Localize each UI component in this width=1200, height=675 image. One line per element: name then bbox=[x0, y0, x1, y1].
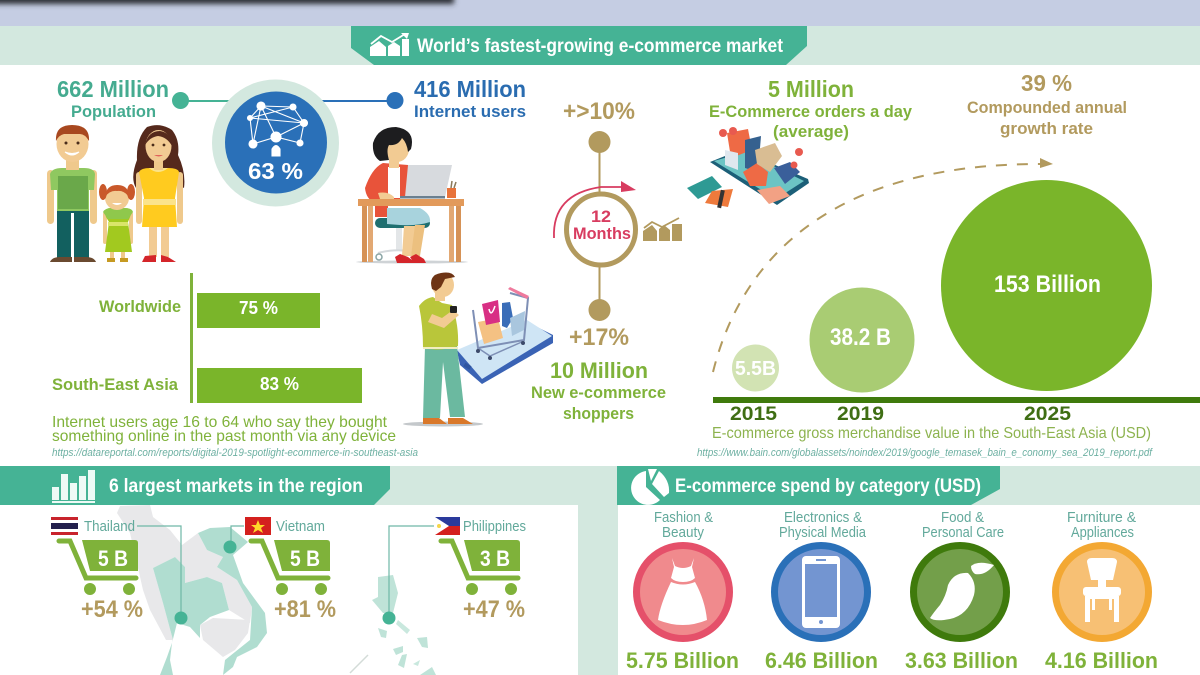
icon: growth chart bbox=[370, 33, 409, 56]
timeline axis bbox=[588, 131, 610, 321]
stat: more than 10 percent: +>10% bbox=[563, 98, 635, 125]
category: fashion and beauty bbox=[626, 509, 739, 673]
icon: bar chart bbox=[52, 470, 95, 503]
flag: vietnam bbox=[245, 517, 271, 535]
axis years bbox=[730, 404, 1071, 425]
banner: market heading bbox=[351, 26, 807, 65]
stat: internet users: 416 Million bbox=[414, 76, 526, 102]
axis years: 2015 bbox=[730, 404, 777, 425]
source link: datareportal: https://datareportal.com/reports/digital-2019-spotlight-ecommerce-in-southeast-asia bbox=[52, 447, 418, 459]
bubble: 2015 bbox=[732, 344, 779, 392]
shopping cart bbox=[473, 287, 529, 360]
category: food and personal care: Food & bbox=[941, 509, 984, 526]
category: food and personal care: 3.63 Billion bbox=[905, 648, 1018, 673]
icon: chair bbox=[1083, 558, 1121, 622]
bar: worldwide: Worldwide bbox=[99, 297, 181, 316]
stat: new shoppers: shoppers bbox=[563, 404, 634, 423]
bubble: 2015: 5.5B bbox=[735, 358, 776, 380]
caption: chart: E-commerce gross merchandise value in the South-East Asia (USD) bbox=[712, 425, 1151, 442]
arrow: dashed growth curve bbox=[713, 158, 1053, 372]
flag: thailand bbox=[51, 517, 78, 535]
icon: cart 5B: 5 B bbox=[98, 546, 128, 571]
woman bbox=[133, 125, 184, 262]
axis years: 2019 bbox=[837, 404, 884, 425]
stat: daily orders: (average) bbox=[773, 122, 849, 141]
market: philippines bbox=[382, 517, 526, 624]
bar: worldwide bbox=[99, 293, 320, 328]
section band: market heading bbox=[0, 26, 1200, 65]
icon: dress bbox=[658, 558, 707, 625]
category: fashion and beauty: Beauty bbox=[662, 524, 704, 541]
arrow: circular bbox=[554, 181, 636, 238]
market: thailand: Thailand bbox=[84, 518, 135, 535]
stat: compounded annual growth: 39 % bbox=[1021, 70, 1072, 96]
flag: philippines bbox=[435, 517, 460, 535]
market: vietnam bbox=[224, 517, 336, 623]
stat: compounded annual growth bbox=[967, 70, 1127, 138]
icon: mango bbox=[930, 563, 994, 620]
stat: population bbox=[57, 76, 169, 121]
category: food and personal care: Personal Care bbox=[922, 524, 1004, 541]
bar: south-east asia bbox=[52, 368, 362, 403]
stat: compounded annual growth: Compounded annual bbox=[967, 98, 1127, 117]
category: fashion and beauty: 5.75 Billion bbox=[626, 648, 739, 673]
bar: south-east asia: 83 % bbox=[260, 374, 299, 394]
section background: lower band bbox=[0, 466, 1200, 675]
man bbox=[47, 125, 97, 262]
icon: small growth chart bbox=[643, 218, 682, 241]
market: thailand: +54 % bbox=[81, 596, 143, 623]
icon: network person bbox=[248, 102, 308, 156]
illustration: family bbox=[47, 125, 184, 262]
top background strip bbox=[0, 0, 1200, 26]
category: furniture and appliances: Furniture & bbox=[1067, 509, 1136, 526]
category: furniture and appliances: 4.16 Billion bbox=[1045, 648, 1158, 673]
category: electronics and physical media: 6.46 Billion bbox=[765, 648, 878, 673]
market: vietnam: +81 % bbox=[274, 596, 336, 623]
heading: market: World’s fastest-growing e-commerce market bbox=[417, 36, 784, 57]
ring: 12 months bbox=[566, 194, 636, 265]
market: philippines: +47 % bbox=[463, 596, 525, 623]
donut: 63 percent: 63 % bbox=[248, 158, 303, 184]
panel: largest markets bbox=[0, 466, 526, 675]
caption: online buyers: Internet users age 16 to 64 who say they bought bbox=[52, 414, 388, 431]
market: philippines: Philippines bbox=[463, 518, 526, 535]
stat: internet users: Internet users bbox=[414, 102, 526, 121]
icon: cart 5B: 5 B bbox=[290, 546, 320, 571]
icon: pie chart bbox=[631, 469, 669, 505]
map: south-east asia bbox=[117, 505, 436, 675]
icon: cart 3B bbox=[441, 540, 520, 595]
category: electronics and physical media: Physical Media bbox=[779, 524, 867, 541]
category: furniture and appliances: Appliances bbox=[1071, 524, 1134, 541]
chart: internet users who bought online bbox=[52, 273, 418, 459]
heading: largest markets: 6 largest markets in the region bbox=[109, 476, 363, 497]
banner: largest markets bbox=[0, 466, 390, 505]
stat: compounded annual growth: growth rate bbox=[1000, 119, 1093, 138]
timeline: 12 month growth bbox=[531, 98, 682, 423]
axis years: 2025 bbox=[1024, 404, 1071, 425]
ring: 12 months: Months bbox=[573, 224, 631, 243]
icon: smartphone bbox=[802, 556, 840, 628]
bubble chart: gross merchandise value bbox=[697, 180, 1200, 459]
stat: daily orders bbox=[709, 76, 913, 141]
bubble: 2019 bbox=[810, 288, 914, 392]
illustration: woman at desk bbox=[356, 127, 468, 264]
illustration: man with phone and cart bbox=[403, 272, 553, 426]
bar: south-east asia: South-East Asia bbox=[52, 375, 179, 394]
panel: population and internet users bbox=[47, 76, 526, 264]
stat: population: Population bbox=[71, 102, 156, 121]
stat: internet users bbox=[414, 76, 526, 121]
market: thailand bbox=[51, 517, 188, 624]
stat: daily orders: 5 Million bbox=[768, 76, 854, 102]
stat: daily orders: E-Commerce orders a day bbox=[709, 102, 913, 121]
category: electronics and physical media: Electronics & bbox=[784, 509, 862, 526]
caption: online buyers: something online in the past month via any device bbox=[52, 428, 396, 445]
stat: new shoppers: 10 Million bbox=[550, 358, 648, 383]
banner: spend by category bbox=[617, 466, 1000, 505]
connector: internet users bbox=[303, 92, 404, 109]
icon: cart 3B: 3 B bbox=[480, 546, 510, 571]
bubble: 2025: 153 Billion bbox=[994, 271, 1101, 298]
axis bbox=[713, 397, 1200, 403]
source link: bain: https://www.bain.com/globalassets/noindex/2019/google_temasek_bain_e_conomy_sea_2019_report.pdf bbox=[697, 447, 1153, 459]
girl bbox=[99, 184, 135, 262]
heading: spend by category: E-commerce spend by category (USD) bbox=[675, 476, 981, 497]
stat: new shoppers: +17% bbox=[569, 324, 629, 351]
caption: online buyers bbox=[52, 414, 396, 445]
category: food and personal care bbox=[905, 509, 1018, 673]
category: electronics and physical media bbox=[765, 509, 878, 673]
donut: 63 percent bbox=[212, 80, 339, 206]
category: fashion and beauty: Fashion & bbox=[654, 509, 713, 526]
connector: population bbox=[172, 92, 237, 109]
bubble: 2025 bbox=[941, 180, 1152, 391]
category: furniture and appliances bbox=[1045, 509, 1158, 673]
market: vietnam: Vietnam bbox=[276, 518, 325, 535]
stat: new shoppers bbox=[531, 324, 666, 423]
stat: population: 662 Million bbox=[57, 76, 169, 102]
stat: new shoppers: New e-commerce bbox=[531, 383, 666, 402]
bar: worldwide: 75 % bbox=[239, 298, 278, 318]
ring: 12 months: 12 bbox=[591, 207, 611, 226]
bubble: 2019: 38.2 B bbox=[830, 324, 891, 351]
icon: shopping on phone bbox=[687, 127, 809, 208]
panel: spend by category bbox=[617, 466, 1158, 673]
